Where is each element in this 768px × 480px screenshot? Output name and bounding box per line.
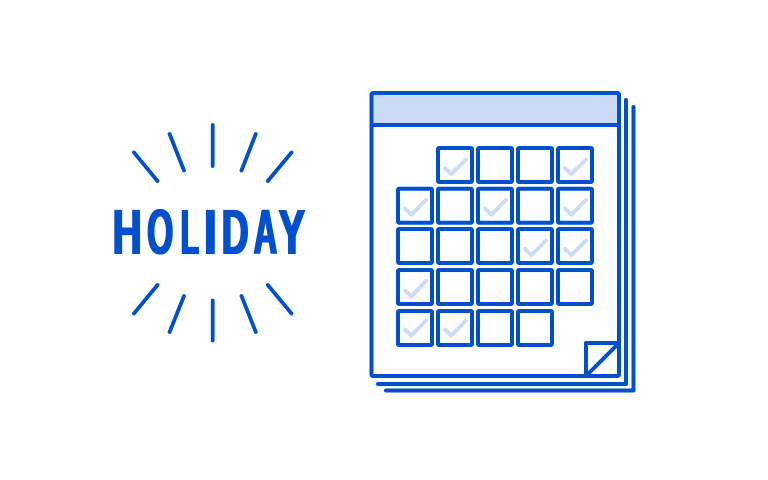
heading: HOLIDAY: Y (279, 196, 305, 268)
heading: HOLIDAY: I (204, 196, 217, 268)
heading: HOLIDAY: O (147, 196, 173, 268)
day cells grid (398, 148, 592, 345)
page fold (586, 343, 619, 376)
back pages (378, 100, 634, 390)
heading: HOLIDAY: D (222, 196, 249, 268)
header divider (372, 123, 619, 127)
rays: bottom (134, 285, 292, 340)
check marks (405, 160, 586, 336)
rays: top (134, 125, 292, 181)
calendar page outline (372, 93, 619, 376)
calendar header band (372, 93, 619, 125)
heading: HOLIDAY: L (181, 196, 199, 268)
heading: HOLIDAY: A (254, 196, 277, 268)
holiday badge (113, 125, 305, 340)
calendar (372, 93, 634, 390)
heading: HOLIDAY: H (113, 196, 142, 268)
